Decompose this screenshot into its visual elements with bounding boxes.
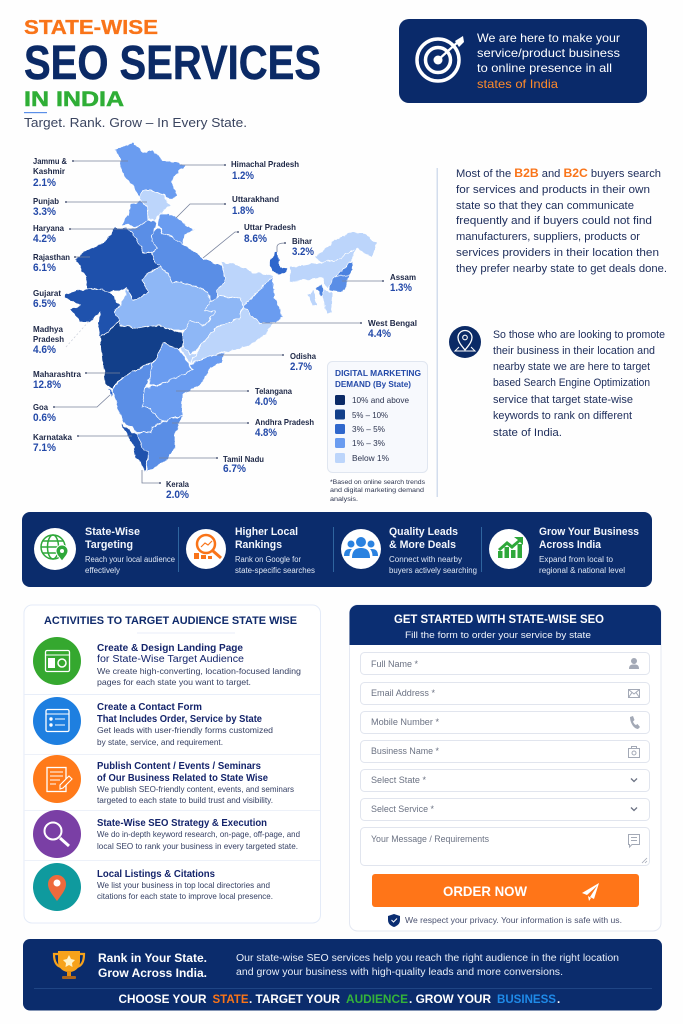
text block: B2B and B2C buyers: they prefer nearby state to get deals done.	[456, 263, 667, 275]
activity: landing page	[33, 637, 301, 687]
panel: bottom banner: Rank in Your State.	[98, 951, 207, 965]
activity: seo strategy	[33, 810, 300, 858]
text block: state-wise targeting: service that target state-wise	[493, 394, 633, 406]
state labels right: 4.8%	[255, 427, 277, 439]
benefit: quality leads: Connect with nearby	[389, 555, 462, 564]
state labels left: Karnataka	[33, 432, 72, 442]
state labels right: Telangana	[255, 386, 292, 396]
activity: contact form	[33, 697, 273, 747]
state labels left: 3.3%	[33, 206, 56, 218]
legend: digital marketing demand	[328, 362, 428, 472]
benefit: higher local rankings	[186, 526, 315, 575]
panel: bottom banner: and grow your business with high-quality leads and more conversions.	[236, 967, 563, 978]
benefit: higher local rankings: state-specific searches	[235, 566, 315, 575]
field: business name: Business Name *	[371, 746, 439, 756]
title block: SEO SERVICES	[24, 37, 321, 90]
slogan: . TARGET YOUR	[249, 994, 341, 1006]
text block: state-wise targeting: nearby state we are here to target	[493, 361, 650, 373]
legend: digital marketing demand: DIGITAL MARKETING	[335, 368, 421, 378]
state labels left: 4.6%	[33, 344, 56, 356]
state labels left: Madhya	[33, 324, 63, 334]
state labels right: 1.8%	[232, 205, 254, 217]
form header	[350, 605, 661, 645]
state labels right	[166, 159, 417, 501]
privacy note: We respect your privacy. Your information is safe with us.	[405, 915, 622, 925]
state labels left: Punjab	[33, 196, 59, 206]
slogan: STATE	[212, 994, 249, 1006]
activity: landing page: for State-Wise Target Audience	[97, 654, 244, 665]
state labels right: Uttar Pradesh	[244, 222, 296, 232]
state labels left: Haryana	[33, 223, 64, 233]
activity: publish content: We publish SEO-friendly content, events, and seminars	[97, 784, 294, 794]
text block: B2B and B2C buyers: frequently and if buyers could not find	[456, 215, 652, 227]
activity: contact form: Create a Contact Form	[97, 702, 202, 713]
field: message: Your Message / Requirements	[371, 834, 489, 844]
state labels right: Uttarakhand	[232, 194, 279, 204]
activity: seo strategy: We do in-depth keyword research, on-page, off-page, and	[97, 829, 300, 839]
activity: contact form: by state, service, and requirement.	[97, 737, 223, 747]
legend: digital marketing demand: 10% and above	[352, 395, 409, 405]
state labels left: 6.1%	[33, 262, 56, 274]
activity: local listings: Local Listings & Citations	[97, 869, 215, 880]
callout: top right intro: service/product business	[477, 46, 620, 60]
footnote: *Based on online search trends	[330, 479, 426, 486]
field: email: Email Address *	[371, 688, 435, 698]
form header: Fill the form to order your service by state	[405, 630, 591, 641]
state labels left: 12.8%	[33, 379, 61, 391]
text block: B2B and B2C buyers: manufacturers, suppliers, products or	[456, 231, 640, 243]
panel: order form	[350, 605, 661, 931]
state labels right: Bihar	[292, 236, 313, 246]
field: message	[360, 828, 650, 866]
footnote: and digital marketing demand	[330, 487, 424, 494]
state labels left: Kashmir	[33, 166, 66, 176]
benefit: grow your business: regional & national level	[539, 566, 625, 575]
text block: state-wise targeting: state of India.	[493, 427, 562, 439]
activity: local listings: We list your business in top local directories and	[97, 880, 270, 890]
benefit: higher local rankings: Rank on Google for	[235, 555, 301, 564]
state labels left: Goa	[33, 402, 48, 412]
benefit: state-wise targeting: Targeting	[85, 539, 133, 551]
field: select service	[360, 798, 650, 820]
state labels right: Assam	[390, 272, 416, 282]
panel: bottom banner	[23, 939, 662, 1010]
benefit: grow your business: Grow Your Business	[539, 526, 639, 538]
panel: bottom banner: Our state-wise SEO services help you reach the right audience in the right location	[236, 953, 619, 964]
text block: state-wise targeting: their business in their location and	[493, 345, 655, 357]
state labels left	[33, 156, 81, 454]
benefit: quality leads: buyers actively searching	[389, 566, 477, 575]
text block: B2B and B2C buyers: for services and products in their own	[456, 184, 650, 196]
state labels right: 4.4%	[368, 328, 391, 340]
leader lines for state labels	[53, 160, 384, 484]
state labels left: 7.1%	[33, 442, 56, 454]
form header: GET STARTED WITH STATE-WISE SEO	[394, 612, 604, 626]
panel: benefits band	[22, 512, 652, 587]
activity: seo strategy: local SEO to rank your business in every targeted state.	[97, 841, 298, 851]
text block: B2B and B2C buyers	[456, 166, 667, 275]
legend: digital marketing demand: 1% – 3%	[352, 438, 385, 448]
text block: state-wise targeting	[493, 329, 665, 439]
state labels right: 1.2%	[232, 170, 254, 182]
benefit: quality leads	[341, 526, 477, 575]
callout: top right intro	[399, 19, 647, 103]
state labels right: 2.0%	[166, 489, 189, 501]
legend: digital marketing demand: DEMAND (By State)	[335, 379, 411, 389]
activity: publish content: Publish Content / Events / Seminars	[97, 761, 261, 772]
state labels right: 4.0%	[255, 396, 277, 408]
text block: B2B and B2C buyers: Most of the B2B and B2C buyers search	[456, 166, 661, 180]
state labels left: 2.1%	[33, 177, 56, 189]
field: email	[360, 682, 650, 704]
activity: contact form: Get leads with user-friendly forms customized	[97, 725, 273, 735]
field: business name	[360, 740, 650, 762]
callout: top right intro: to online presence in all	[477, 61, 612, 75]
title block: IN INDIA	[24, 88, 124, 111]
slogan: .	[557, 994, 560, 1006]
panel: bottom banner: Grow Across India.	[98, 966, 207, 980]
activity: publish content: of Our Business Related to State Wise	[97, 773, 268, 784]
benefit: state-wise targeting: effectively	[85, 566, 120, 575]
state labels right: Kerala	[166, 479, 189, 489]
state labels left: 4.2%	[33, 233, 56, 245]
field: mobile	[360, 712, 650, 734]
icon: location pin badge	[449, 326, 481, 358]
field: select state: Select State *	[371, 775, 426, 785]
benefit: state-wise targeting: State-Wise	[85, 526, 140, 538]
legend: digital marketing demand: Below 1%	[352, 453, 389, 463]
state labels left: Maharashtra	[33, 369, 81, 379]
benefit: grow your business: Across India	[539, 539, 602, 551]
slogan: . GROW YOUR	[409, 994, 492, 1006]
state labels right: 1.3%	[390, 282, 412, 294]
state labels left: Rajasthan	[33, 252, 70, 262]
state labels left: 0.6%	[33, 412, 56, 424]
footnote	[330, 479, 426, 503]
state labels right: Himachal Pradesh	[231, 159, 299, 169]
panel: activities	[24, 605, 320, 923]
activity: contact form: That Includes Order, Service by State	[97, 714, 262, 725]
slogan: CHOOSE YOUR	[118, 994, 207, 1006]
state labels right: Odisha	[290, 351, 316, 361]
activity: publish content	[33, 755, 294, 805]
field: mobile: Mobile Number *	[371, 717, 439, 727]
benefit: higher local rankings: Rankings	[235, 539, 282, 551]
benefit: grow your business: Expand from local to	[539, 555, 614, 564]
button: order now: ORDER NOW	[443, 883, 528, 899]
state labels left: Gujarat	[33, 288, 61, 298]
benefit: quality leads: & More Deals	[389, 539, 456, 551]
field: select service: Select Service *	[371, 804, 434, 814]
benefit: quality leads: Quality Leads	[389, 526, 458, 538]
text block: state-wise targeting: So those who are looking to promote	[493, 329, 665, 341]
state labels left: 6.5%	[33, 298, 56, 310]
state labels left: Pradesh	[33, 334, 64, 344]
text block: B2B and B2C buyers: state so that they can communicate	[456, 200, 634, 212]
title block	[24, 17, 321, 130]
state labels right: 8.6%	[244, 233, 267, 245]
state labels right: West Bengal	[368, 318, 417, 328]
activity: local listings: citations for each state to improve local presence.	[97, 891, 273, 901]
activity: landing page: We create high-converting, location-focused landing	[97, 666, 301, 676]
state labels right: 6.7%	[223, 463, 246, 475]
icon: target	[417, 36, 464, 81]
field: full name	[360, 652, 650, 674]
text block: state-wise targeting: keywords to rank on different	[493, 410, 632, 422]
button: order now	[372, 874, 639, 907]
icon: trophy	[54, 951, 84, 979]
activity: landing page: pages for each state you want to target.	[97, 677, 251, 687]
text block: B2B and B2C buyers: services providers in their location then	[456, 247, 659, 259]
state labels right: 2.7%	[290, 361, 312, 373]
benefit: higher local rankings: Higher Local	[235, 526, 298, 538]
legend: digital marketing demand: 3% – 5%	[352, 424, 385, 434]
vertical divider	[436, 168, 438, 497]
activities heading: ACTIVITIES TO TARGET AUDIENCE STATE WISE	[44, 615, 297, 627]
state labels left: Jammu &	[33, 156, 67, 166]
field: select state	[360, 770, 650, 792]
benefit: grow your business	[489, 526, 639, 575]
title block: STATE-WISE	[24, 17, 158, 39]
slogan	[118, 994, 560, 1006]
map of India by state	[65, 143, 377, 472]
slogan: BUSINESS	[497, 994, 556, 1006]
activity: seo strategy: State-Wise SEO Strategy & Execution	[97, 818, 267, 829]
state labels right: 3.2%	[292, 246, 314, 258]
state labels right: Andhra Pradesh	[255, 417, 314, 427]
footnote: analysis.	[330, 496, 358, 503]
benefit: state-wise targeting	[34, 526, 176, 575]
callout: top right intro: We are here to make your	[477, 31, 620, 45]
title block: Target. Rank. Grow – In Every State.	[24, 115, 247, 130]
legend: digital marketing demand: 5% – 10%	[352, 410, 388, 420]
benefit: state-wise targeting: Reach your local audience	[85, 555, 176, 564]
state labels right: Tamil Nadu	[223, 454, 264, 464]
field: full name: Full Name *	[371, 659, 418, 669]
activity: local listings	[33, 863, 273, 911]
callout: top right intro: states of India	[477, 77, 558, 91]
text block: state-wise targeting: based Search Engine Optimization	[493, 377, 650, 389]
activity: landing page: Create & Design Landing Page	[97, 643, 243, 654]
activity: publish content: targeted to each state to build trust and visibility.	[97, 795, 273, 805]
slogan: AUDIENCE	[346, 994, 408, 1006]
